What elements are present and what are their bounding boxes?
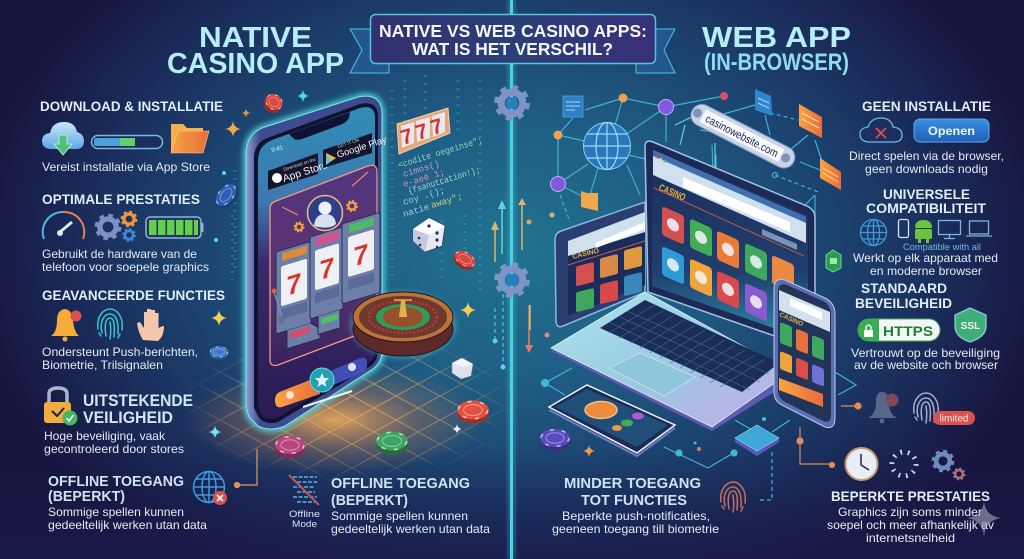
panel: offline toegang left: OFFLINE TOEGANG — [48, 473, 184, 490]
code snippet: coy .(); — [402, 186, 446, 208]
gears on the divider — [497, 88, 527, 295]
icon: large globe — [584, 122, 630, 170]
notch — [289, 112, 350, 140]
badge: limited: limited — [940, 414, 968, 424]
panel: uitstekende veiligheid: Hoge beveiliging, vaak — [44, 429, 166, 443]
panel: geavanceerde functies — [42, 287, 225, 372]
badge: google play: Google Play — [336, 134, 388, 161]
panel: download & installatie — [40, 98, 223, 174]
icon: offline mode code block — [289, 475, 320, 529]
laptop — [551, 141, 815, 431]
binary data streams — [232, 75, 480, 290]
icon: grey fingerprint — [914, 393, 938, 423]
code snippet: e-aeè 1; — [402, 168, 446, 190]
heading: native casino app — [167, 22, 344, 80]
panel: download & installatie: DOWNLOAD & INSTALLATIE — [40, 98, 223, 114]
casino chips — [210, 91, 570, 458]
panel: universele compatibiliteit: Compatible with all — [903, 242, 981, 252]
icon: bell — [51, 309, 82, 342]
icon: cloud with cross — [860, 118, 902, 142]
slot machine 3: 7 — [353, 237, 369, 272]
icon: monitor — [938, 220, 960, 238]
panel: standaard beveiligheid: STANDAARD — [861, 280, 947, 296]
badge: https: HTTPS — [883, 323, 933, 339]
laptop deck — [551, 296, 790, 431]
tablet — [555, 202, 645, 327]
phone screen — [258, 107, 375, 419]
title text: NATIVE VS WEB CASINO APPS: — [379, 21, 647, 41]
smartphone: native app: 9:41 — [271, 145, 284, 154]
slot machine 2 — [310, 227, 343, 337]
icon: clock — [846, 448, 878, 480]
icon: cloud download — [42, 122, 84, 155]
panel: universele compatibiliteit — [853, 186, 998, 278]
url bar: casinowebsite.com — [703, 113, 780, 160]
panel: geen installatie: geen downloads nodig — [865, 162, 988, 176]
panel: geavanceerde functies: GEAVANCEERDE FUNCTIES — [42, 287, 225, 303]
panel: minder toegang: TOT FUNCTIES — [581, 492, 687, 509]
icon: fingerprint — [98, 309, 122, 339]
icon: progress bar — [92, 136, 162, 148]
slot machine 1 — [276, 239, 320, 352]
icon: battery — [146, 217, 204, 238]
casino label: CASINO — [657, 183, 687, 204]
icon: gears — [97, 212, 136, 241]
slot machine 1: 7 — [286, 267, 302, 302]
panel: download & installatie: Vereist installatie via App Store — [42, 160, 210, 174]
small flat phone — [549, 385, 675, 456]
icon: laptop — [966, 221, 992, 236]
connector — [234, 449, 257, 488]
badge: google play — [323, 133, 388, 168]
smartphone: web — [774, 279, 835, 428]
panel: minder toegang — [552, 475, 745, 536]
panel: beperkte prestaties: BEPERKTE PRESTATIES — [831, 488, 990, 504]
button: openen — [914, 119, 989, 142]
panel: universele compatibiliteit: COMPATIBILITEIT — [866, 200, 986, 216]
code snippet — [397, 136, 484, 220]
node: document blue — [563, 96, 583, 117]
panel: offline toegang left — [48, 449, 257, 532]
panel: offline toegang right: gedeeltelijk werken utan data — [331, 522, 490, 536]
code snippet: <codite oegeinse"; — [397, 136, 484, 171]
panel: universele compatibiliteit: Werkt op elk apparaat med — [853, 251, 998, 265]
browser chrome — [653, 150, 806, 243]
panel: optimale prestaties: telefoon voor soepele graphics — [42, 260, 209, 274]
panel: beperkte prestaties — [827, 448, 994, 545]
777 badge — [397, 108, 450, 154]
panel: minder toegang: Beperkte push-notificaties, — [562, 509, 710, 523]
icon: spinner — [892, 452, 916, 476]
badge: app store — [268, 153, 329, 190]
panel: universele compatibiliteit: en moderne browser — [870, 264, 982, 278]
icon: padlock — [44, 388, 78, 426]
panel: optimale prestaties: OPTIMALE PRESTATIES — [42, 191, 200, 207]
icon: android — [915, 220, 932, 243]
panel: offline toegang right: Sommige spellen kunnen — [331, 509, 468, 523]
keyboard — [600, 300, 779, 392]
badge: app store: App Store — [281, 159, 329, 185]
phone browser chrome — [779, 290, 830, 332]
heading: web app: (IN-BROWSER) — [704, 49, 849, 76]
node: folder orange — [799, 104, 822, 138]
slot lever — [272, 288, 284, 324]
panel: geavanceerde functies: Biometrie, Trilsignalen — [42, 358, 163, 372]
title banner — [350, 14, 675, 73]
floating chip diamond — [735, 425, 779, 456]
tablet browser chrome — [568, 212, 645, 256]
badge: ssl shield: SSL — [961, 321, 980, 332]
panel: offline toegang left: (BEPERKT) — [48, 488, 125, 505]
panel: offline toegang right — [289, 475, 490, 536]
code snippet: cimos() — [402, 159, 441, 180]
panel: geavanceerde functies: Ondersteunt Push-berichten, — [42, 345, 198, 359]
sparkles — [209, 90, 595, 457]
badge: app store: Download on the — [283, 157, 317, 172]
panel: uitstekende veiligheid — [44, 388, 193, 456]
phone glow — [246, 96, 382, 429]
panel: beperkte prestaties: Graphics zijn soms minder — [838, 505, 982, 519]
icon: grey bell — [868, 392, 898, 424]
panel: offline toegang left: gedeeltelijk werken utan data — [48, 518, 207, 532]
node: lock green — [826, 250, 841, 272]
777 badge: 7 — [428, 114, 446, 140]
panel: limited notifications — [868, 392, 975, 425]
center divider — [507, 0, 516, 559]
url bar — [687, 101, 799, 172]
tablet icons — [576, 246, 642, 312]
node: folder small — [581, 191, 598, 211]
slot machine 2: 7 — [319, 251, 335, 286]
orange connector to limited performance — [797, 403, 861, 468]
panel: optimale prestaties — [42, 191, 209, 274]
icon: hand — [137, 309, 164, 341]
phone casino label: CASINO — [778, 311, 804, 328]
roulette wheel — [350, 292, 456, 358]
smartphone: native app — [246, 96, 388, 429]
title text — [379, 21, 647, 59]
heading: native casino app: CASINO APP — [167, 48, 344, 80]
dice small — [452, 358, 473, 379]
slot machine 3 — [342, 212, 380, 304]
code snippet: natie — [402, 202, 431, 220]
icon: folder — [171, 124, 209, 153]
panel: uitstekende veiligheid: VEILIGHEID — [83, 408, 173, 427]
panel: standaard beveiligheid: av de website och browser — [854, 358, 998, 372]
icon: red fingerprint — [721, 482, 745, 512]
heading: web app: WEB APP — [702, 22, 851, 54]
badge: https — [858, 319, 940, 341]
panel: offline toegang right: OFFLINE TOEGANG — [331, 475, 470, 492]
decor inside game panel — [282, 172, 368, 232]
panel: beperkte prestaties: internetsnelheid — [866, 531, 955, 545]
icon: gauge — [43, 212, 84, 239]
panel: geen installatie: Direct spelen via de browser, — [849, 149, 1004, 163]
panel: uitstekende veiligheid: UITSTEKENDE — [83, 391, 193, 410]
panel: geen installatie: GEEN INSTALLATIE — [862, 98, 991, 114]
dice large — [413, 218, 445, 252]
panel: standaard beveiligheid: Vertrouwt op de beveiliging — [851, 346, 1000, 360]
game panel — [270, 165, 377, 365]
node: document tilted — [755, 89, 772, 116]
icon: globe with cross — [194, 472, 227, 505]
code snippet: away"; — [430, 192, 464, 211]
title text: WAT IS HET VERSCHIL? — [412, 39, 613, 59]
panel: standaard beveiligheid: BEVEILIGHEID — [855, 295, 952, 311]
777 badge: 7 — [398, 124, 416, 150]
icon: globe — [860, 220, 886, 246]
777 badge: 7 — [413, 119, 431, 145]
trackpad — [609, 353, 695, 396]
panel: beperkte prestaties: soepel och meer afhankelijk av — [827, 518, 994, 532]
icon: phone — [898, 220, 908, 238]
floor grid with orange glow — [186, 345, 514, 480]
badge: ssl shield — [955, 308, 986, 342]
code snippet: {fsanutcation!); — [407, 165, 482, 197]
panel: offline toegang right: (BEPERKT) — [331, 492, 408, 509]
avatar — [308, 196, 342, 230]
circuit lines under laptop — [542, 368, 856, 500]
icon: offline mode code block: Offline — [289, 509, 320, 519]
panel: minder toegang: geeneen toegang till biometrie — [552, 522, 719, 536]
button: openen: Openen — [928, 124, 975, 138]
panel: standaard beveiligheid — [851, 280, 1000, 372]
tablet heading: CASINO — [572, 247, 600, 261]
node: folder orange lower — [820, 158, 841, 190]
watermark sparkle — [967, 502, 1001, 536]
panel: geen installatie — [849, 98, 1004, 176]
phone body — [246, 96, 382, 429]
network diagram — [550, 89, 841, 272]
bottom navigation — [275, 358, 367, 407]
panel: universele compatibiliteit: UNIVERSELE — [883, 186, 970, 202]
data arrows around divider — [491, 198, 554, 370]
panel: offline toegang left: Sommige spellen kunnen — [48, 505, 184, 519]
heading: native casino app: NATIVE — [199, 22, 312, 54]
icon: offline mode code block: Mode — [292, 519, 317, 529]
laptop screen — [645, 141, 815, 350]
badge: google play: GET IT ON — [337, 137, 360, 149]
icon: gears — [934, 452, 964, 479]
app icon grid — [662, 206, 794, 334]
panel: optimale prestaties: Gebruikt de hardware van de — [42, 247, 197, 261]
heading: web app — [702, 22, 851, 76]
phone orange button — [779, 378, 823, 407]
phone icons — [780, 322, 824, 387]
panel: minder toegang: MINDER TOEGANG — [564, 475, 701, 492]
panel: uitstekende veiligheid: gecontroleerd door stores — [44, 442, 184, 456]
